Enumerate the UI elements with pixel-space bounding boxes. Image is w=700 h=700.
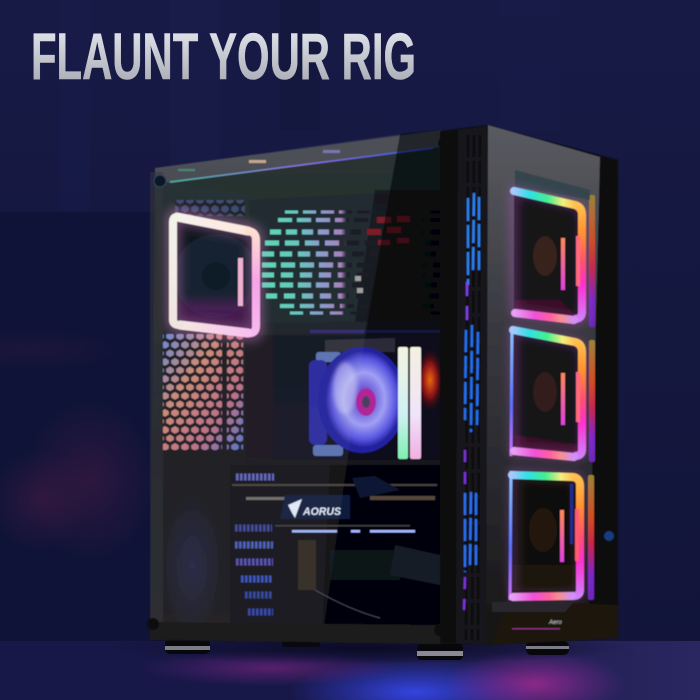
vent lights lower purple (464, 450, 465, 610)
fan ring top (177, 217, 248, 231)
dark glass shade upper (364, 130, 442, 335)
side glass panel (486, 125, 618, 645)
mesh colored holes (262, 212, 442, 313)
foot: front left (165, 638, 210, 654)
GPU nameplate (280, 495, 350, 519)
side fan 3 (510, 471, 581, 600)
vent lights purple (466, 282, 468, 330)
fan bracket (313, 352, 343, 456)
side fan 2 (511, 328, 583, 457)
vent lights upper (468, 193, 479, 285)
aerocool logo: Aero (548, 620, 562, 626)
fan ring left (173, 217, 180, 325)
left frame column (150, 172, 163, 640)
ring right (574, 205, 582, 319)
front left fan (173, 216, 258, 334)
motherboard area (273, 335, 442, 460)
GPU and lower compartment (230, 465, 442, 640)
ring left (512, 190, 514, 314)
side strip lights (588, 195, 595, 600)
fan ring right (248, 231, 256, 333)
vent lights lower (465, 492, 476, 572)
inner strip (561, 238, 565, 290)
RAM stick 1 (398, 347, 408, 459)
fan ring bottom (180, 325, 248, 333)
GPU light strips (292, 530, 415, 532)
side fan 1 (513, 170, 590, 322)
vent column (456, 126, 487, 645)
side panel grey reflection (486, 125, 600, 645)
PSU shroud block (245, 335, 273, 465)
vent slots (466, 135, 480, 640)
front glass panel base (150, 130, 442, 644)
top band (155, 130, 442, 183)
CPU fan (309, 347, 406, 453)
ring glow (514, 190, 583, 322)
corner screws (147, 137, 450, 636)
ring bottom (515, 313, 574, 320)
rear mesh panel (248, 190, 442, 333)
blue tint in lower-left glass (162, 495, 222, 635)
foot: rear right (526, 641, 569, 655)
red holes (367, 216, 410, 245)
blue dots on side panel (604, 531, 614, 541)
AORUS text: AORUS (302, 506, 342, 518)
feet of the case (165, 638, 569, 660)
top light line (170, 148, 433, 182)
bottom frame (150, 622, 442, 644)
RAM stick 2 (410, 347, 421, 459)
front glass reflection (150, 134, 400, 640)
PC case (147, 125, 618, 645)
foot: front right (417, 644, 463, 660)
AORUS logo (288, 499, 302, 518)
title: FLAUNT YOUR RIG (31, 19, 416, 93)
white holes (355, 276, 363, 293)
top interior (172, 147, 442, 200)
fan ring glow (173, 216, 256, 334)
corner pillar (440, 125, 488, 645)
expansion slot lights (235, 477, 274, 612)
logo underline (512, 628, 560, 630)
floor with coloured light reflections (0, 632, 700, 700)
ring top (514, 191, 575, 205)
lower side panel band (492, 600, 575, 612)
bottom glow on side panel (490, 600, 618, 645)
foot: front middle (282, 640, 320, 647)
hex mesh panel (163, 200, 245, 450)
vent lights middle (465, 325, 478, 432)
orange RAM glow (416, 348, 444, 412)
cooler heatsink top (325, 338, 395, 352)
top band markers (178, 150, 340, 171)
motherboard detail (298, 540, 400, 590)
